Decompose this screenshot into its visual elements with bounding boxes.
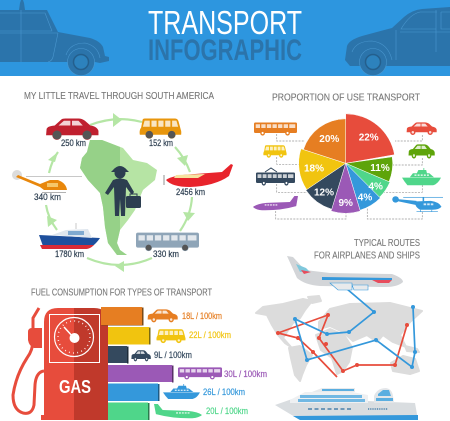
bar: 22L yellow [108, 327, 231, 344]
title [148, 10, 302, 60]
label: 30L: 30L / 100km [224, 369, 267, 379]
taxi silhouette right [345, 7, 450, 76]
taxi silhouette left [0, 0, 109, 76]
heading: typical routes: TYPICAL ROUTES [354, 237, 420, 249]
panel: typical routes [256, 237, 422, 420]
pie percentages: 22% [359, 133, 379, 144]
bar: 9L dark [108, 346, 192, 364]
pie percentages [304, 133, 390, 209]
vehicle: red plane [163, 164, 233, 197]
heading: proportion: PROPORTION OF USE TRANSPORT [272, 92, 420, 104]
traveller figure with suitcase [105, 166, 141, 216]
heading: fuel: FUEL CONSUMPTION FOR TYPES OF TRANSPORT [31, 286, 212, 298]
pie percentages: 11% [370, 163, 390, 174]
pie percentages: 4% [368, 182, 383, 193]
red ship routes [276, 313, 409, 377]
pie percentages: 4% [358, 193, 372, 204]
panel: travel through South America [12, 90, 233, 272]
icon: dark tram [256, 168, 295, 186]
label: 250 km: 250 km [61, 138, 86, 148]
header banner [0, 0, 450, 76]
heading: typical routes [314, 237, 420, 262]
South America map [80, 140, 157, 255]
icon: purple plane [253, 196, 298, 210]
label: 9L: 9L / 100km [154, 350, 192, 360]
icon: green car [409, 144, 435, 159]
leader lines [276, 134, 422, 219]
bar: 30L purple [108, 365, 267, 382]
icon: green ship [402, 168, 441, 185]
title: TRANSPORT [148, 4, 302, 41]
bar: 18L orange [101, 307, 222, 326]
pie chart [299, 114, 394, 213]
pie percentages: 20% [319, 134, 339, 145]
bar: 26L blue [108, 384, 245, 401]
pie percentages: 9% [338, 198, 353, 209]
airliner [287, 256, 403, 290]
vehicle: grey coach [136, 233, 199, 259]
bar: 20L green [108, 402, 248, 420]
vehicle: red car [46, 119, 98, 148]
heading: travel: MY LITTLE TRAVEL THROUGH SOUTH AMERICA [24, 90, 214, 102]
icon: blue helicopter [392, 196, 443, 212]
pie percentages: 12% [314, 188, 334, 199]
cruise ship [275, 388, 418, 420]
vehicle: blue ship [39, 223, 100, 259]
label: 1780 km: 1780 km [55, 249, 84, 259]
pie percentages: 18% [304, 164, 324, 175]
blue air routes [293, 289, 417, 369]
label: 26L: 26L / 100km [203, 387, 245, 397]
label: 20L: 20L / 100km [206, 406, 248, 416]
world map [256, 296, 422, 381]
gas pump [13, 308, 112, 420]
icon: red car [407, 122, 437, 135]
label: GAS: GAS [59, 377, 91, 397]
label: 330 km: 330 km [153, 249, 179, 259]
panel: proportion of use transport [253, 92, 443, 219]
label: 2456 km: 2456 km [176, 187, 205, 197]
label: 340 km: 340 km [34, 192, 61, 202]
title: INFOGRAPHIC [148, 34, 302, 67]
vehicle: orange van [140, 118, 181, 148]
label: 152 km: 152 km [149, 138, 173, 148]
label: 18L: 18L / 100km [182, 311, 222, 321]
vehicle: orange helicopter [12, 170, 82, 202]
label: 22L: 22L / 100km [189, 330, 231, 340]
icon: yellow van [263, 145, 287, 158]
panel: fuel consumption [13, 286, 267, 420]
circular route arrows [46, 113, 195, 272]
icon: orange bus [254, 122, 297, 136]
